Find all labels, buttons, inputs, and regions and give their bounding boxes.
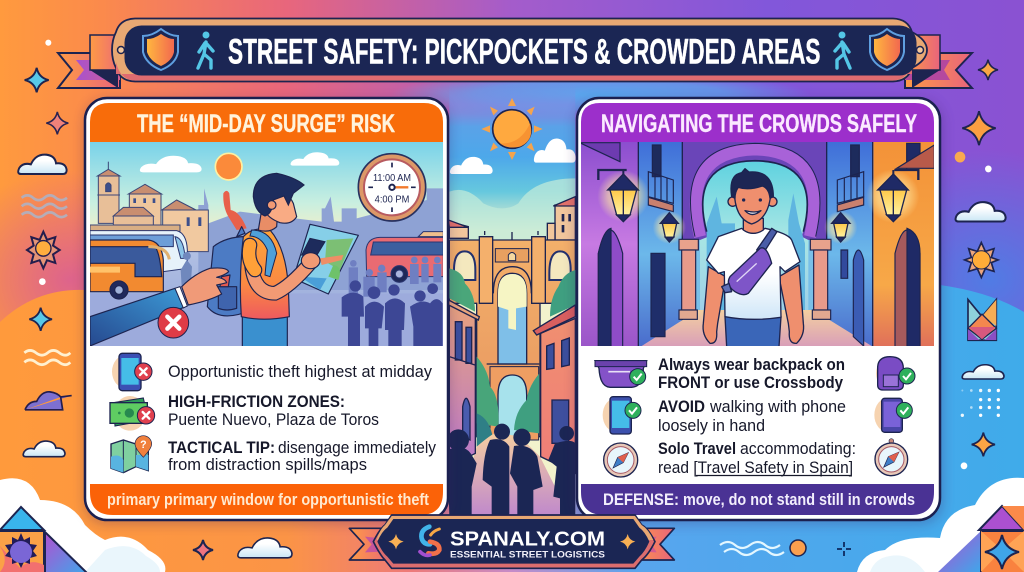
panel header: [90, 103, 443, 142]
panel frame: [577, 98, 940, 520]
list row: tactical tip: ?: [140, 439, 147, 451]
panel footer: primary primary window for opportunistic theft: [107, 490, 429, 509]
list row: phone safety: walking with phone: [709, 397, 846, 416]
icon: left shield: [143, 29, 178, 70]
back bus: [90, 231, 187, 272]
crowd silhouettes: [342, 280, 443, 347]
tourist jeans: [242, 317, 287, 347]
bottom right cloud and geometric tiles: [193, 478, 1024, 572]
arms: [703, 267, 726, 343]
clock: 4:00 PM: [375, 195, 409, 206]
tourist arm with phone: [249, 245, 310, 293]
faded crowd back: [349, 257, 441, 297]
old town buildings: [90, 162, 208, 252]
red statue: [223, 191, 247, 230]
brand name: SPANALY.COM: [450, 528, 605, 551]
map: [293, 224, 358, 294]
list row: backpack on front: FRONT or use Crossbody: [658, 373, 843, 392]
bridge: [449, 231, 575, 440]
icon: left walker: [198, 32, 213, 68]
left side decorations: [18, 40, 72, 457]
tourist backpack: [206, 226, 246, 316]
tourist head: [253, 173, 304, 231]
columns: [679, 239, 831, 319]
ground: [642, 310, 872, 346]
right side decorations: [955, 60, 1006, 469]
list row: solo travel: accommodating:: [740, 439, 856, 458]
balconies and doors: [581, 143, 934, 347]
pickpocket hand: [182, 268, 229, 305]
faded figure: [181, 252, 192, 287]
icon: lanterns: [598, 170, 918, 242]
panel footer: DEFENSE:: [603, 490, 679, 509]
tagline: ESSENTIAL STREET LOGISTICS: [450, 549, 605, 559]
clock: 11:00 AM: [373, 173, 411, 184]
crossbody strap: [757, 228, 777, 253]
list row: high-friction zones: Puente Nuevo, Plaza de Toros: [168, 410, 379, 429]
list row: high-friction zones: HIGH-FRICTION ZONES:: [168, 392, 345, 411]
panel footer: move, do not stand still in crowds: [683, 490, 915, 509]
center illustration: Puente Nuevo bridge and street: [447, 83, 576, 517]
plate: [373, 515, 655, 568]
list row: tactical tip: TACTICAL TIP:: [168, 438, 275, 457]
title banner: [58, 18, 972, 88]
right house: [533, 305, 575, 473]
list row: tactical tip: from distraction spills/maps: [168, 455, 367, 474]
neck and head: [743, 218, 763, 233]
tourist shirt: [240, 229, 289, 319]
backpack strap: [250, 230, 277, 277]
foreground silhouettes: [447, 424, 575, 517]
list row: opportunistic theft: Opportunistic theft highest at midday: [168, 362, 432, 381]
belt bag: [728, 248, 772, 295]
heading: THE “MID-DAY SURGE” RISK: [137, 110, 395, 138]
distant buildings: [448, 197, 575, 240]
list row: backpack on front: Always wear backpack on: [658, 355, 845, 374]
list row: high-friction zones: [110, 392, 379, 431]
bottom left cloud and geometric tiles: [0, 478, 165, 572]
list row: solo travel: Solo Travel: [658, 439, 736, 458]
heading: NAVIGATING THE CROWDS SAFELY: [601, 110, 917, 138]
arch opening: [700, 162, 808, 310]
list row: opportunistic theft: [112, 353, 432, 391]
panel footer: [581, 484, 934, 515]
ribbon tails: [58, 35, 972, 88]
jeans: [725, 317, 781, 347]
sun: [215, 153, 242, 180]
sun with rays: [481, 98, 543, 160]
list row: phone safety: [603, 397, 912, 435]
right bus: [366, 232, 443, 282]
ground: [92, 330, 443, 346]
street: [457, 430, 570, 517]
list row: solo travel: read [Travel Safety in Spain]: [658, 458, 853, 477]
list row: phone safety: loosely in hand: [658, 416, 765, 435]
list row: phone safety: AVOID: [658, 397, 705, 416]
front bus: [90, 240, 169, 299]
list row: tactical tip: [111, 436, 436, 474]
pickpocket sleeve: [90, 288, 184, 346]
distant skyline: [198, 188, 443, 290]
arch ring: [696, 149, 814, 237]
list row: solo travel: [604, 439, 908, 477]
sparkle right: [620, 534, 635, 549]
list row: backpack on front: [595, 355, 915, 392]
banner plate: [112, 18, 927, 82]
sparkle left: [388, 534, 404, 549]
illustration: tourist with pickpocket: [90, 142, 443, 347]
panel header: [581, 103, 934, 142]
icon: right shield: [870, 29, 904, 70]
t-shirt: [707, 228, 800, 319]
panel footer: [90, 484, 443, 515]
footer brand banner: [349, 515, 674, 568]
warning badge: [158, 307, 189, 338]
street walls: [581, 142, 639, 347]
panel: navigating the crowds safely: [577, 98, 940, 520]
list row: tactical tip: disengage immediately: [278, 438, 436, 457]
lantern glows: [597, 170, 649, 222]
trees: [449, 268, 475, 312]
ribbon tails: [349, 528, 674, 560]
panel frame: [85, 98, 448, 520]
illustration: tourist walking with crossbody: [581, 142, 935, 347]
panel shadows: [84, 100, 943, 524]
logo mark: [420, 527, 439, 555]
left house: [449, 300, 479, 467]
clock: [358, 154, 426, 221]
icon: right walker: [835, 32, 850, 68]
panel: mid-day surge risk: [85, 98, 448, 520]
walking tourist: [703, 169, 804, 347]
